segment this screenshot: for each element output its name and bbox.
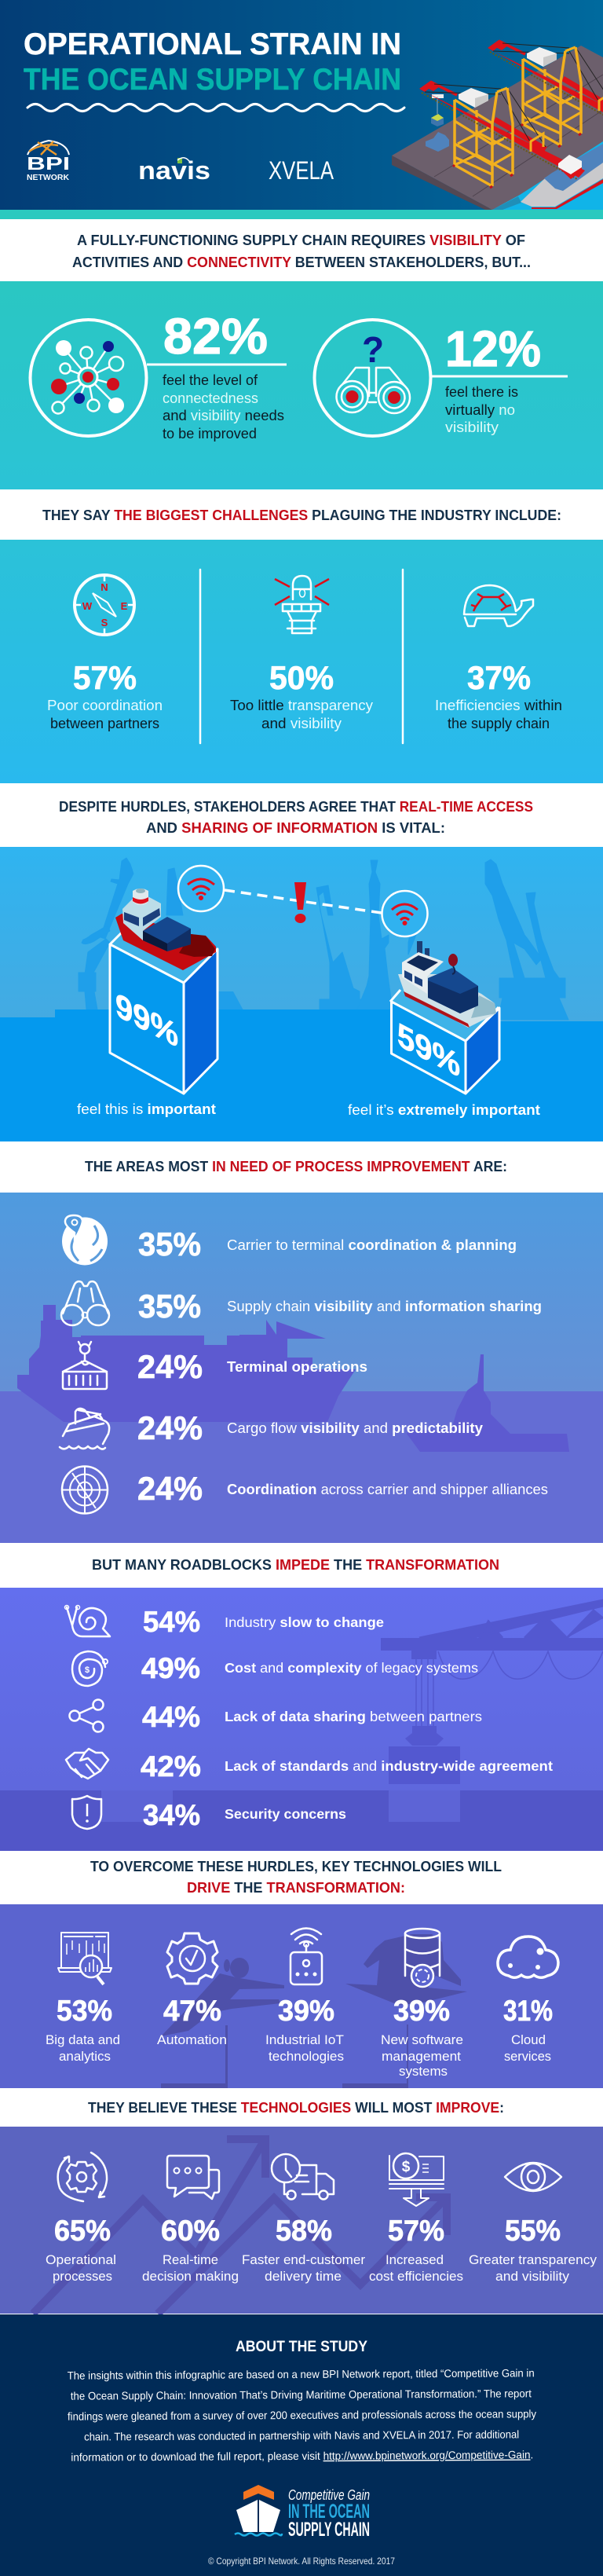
challenge: compass [47, 575, 163, 731]
icon: gear check [167, 1933, 217, 1984]
row 1: Carrier to terminal coordination & planning [227, 1237, 517, 1253]
challenge: turtle [435, 585, 562, 731]
row 1: 54% [143, 1606, 200, 1638]
row 2: 49% [141, 1652, 200, 1684]
item: delivery time [242, 2154, 365, 2284]
item: software systems: New software [381, 2032, 463, 2047]
item: real-time decisions: decision making [142, 2269, 239, 2284]
item: cloud [498, 1937, 558, 2064]
heading: key technologies [90, 1859, 502, 1896]
stat: 82%: feel the level of [163, 372, 258, 388]
row 5 [72, 1796, 346, 1831]
item: industrial IoT [265, 1928, 344, 2064]
challenge: lighthouse: Too little transparency [230, 698, 373, 713]
icon: money with down arrow: $ [402, 2159, 411, 2175]
title [24, 27, 401, 97]
study text: the Ocean Supply Chain: Innovation That’s Driving Maritime Operational Transformation.” The report [71, 2387, 532, 2402]
panel: process improvement [0, 1193, 603, 1543]
challenge: compass: between partners [50, 716, 159, 731]
teal strip [0, 210, 603, 219]
panel: roadblocks [0, 1588, 603, 1851]
row 2: Supply chain visibility and information sharing [227, 1299, 542, 1314]
item: industrial IoT: Industrial IoT [265, 2032, 344, 2047]
icon: IoT device [291, 1928, 322, 1984]
stat: 82%: 82% [163, 308, 268, 365]
challenge: compass: 57% [73, 659, 137, 696]
icon: eye [505, 2163, 561, 2191]
icon: cloud [498, 1937, 558, 1977]
row 4 [60, 1409, 483, 1449]
item: big data: 53% [57, 1995, 112, 2027]
challenge: turtle: the supply chain [448, 716, 550, 731]
icon: radar [62, 1466, 108, 1513]
heading: visibility and connectivity [72, 233, 531, 270]
icon: binoculars with question mark: ? [362, 329, 384, 370]
study text [68, 2366, 536, 2464]
challenge: turtle: Inefficiencies within [435, 698, 562, 713]
challenge: lighthouse: and visibility [261, 716, 342, 731]
row 3: Terminal operations [227, 1359, 367, 1375]
icon: delivery truck with clock [272, 2154, 334, 2200]
heading: real-time access: AND SHARING OF INFORMATION IS VITAL: [146, 820, 445, 836]
logo: BPI Network: NETWORK [27, 173, 69, 182]
item: delivery time: 58% [276, 2215, 332, 2247]
logo: Competitive Gain: SUPPLY CHAIN [288, 2519, 370, 2541]
icon: handshake [66, 1749, 108, 1779]
study text: The insights within this infographic are based on a new BPI Network report, titled “Competitive Gain in [68, 2366, 535, 2382]
icon: shield [72, 1796, 101, 1829]
caption: 59%: feel it’s extremely important [348, 1102, 540, 1118]
item: big data: analytics [59, 2049, 111, 2064]
item: industrial IoT: 39% [278, 1995, 334, 2027]
challenge: turtle: 37% [467, 659, 531, 696]
item: big data [46, 1933, 120, 2064]
panel: visibility statistics [0, 281, 603, 489]
icon: dollar spiral [72, 1651, 108, 1686]
stat: 82%: and visibility needs [163, 408, 284, 423]
item: transparency: Greater transparency [469, 2252, 597, 2267]
ship: red cargo ship [115, 889, 216, 970]
heading: roadblocks: BUT MANY ROADBLOCKS IMPEDE THE TRANSFORMATION [92, 1557, 499, 1573]
heading: key technologies: TO OVERCOME THESE HURDLES, KEY TECHNOLOGIES WILL [90, 1859, 502, 1874]
item: operational processes: processes [53, 2269, 112, 2284]
challenge: lighthouse [230, 576, 373, 731]
item: software systems: systems [399, 2064, 448, 2079]
item: real-time decisions [142, 2156, 239, 2284]
logo: Competitive Gain: IN THE OCEAN [288, 2501, 370, 2523]
item: real-time decisions: 60% [161, 2215, 220, 2247]
item: software systems [381, 1929, 463, 2079]
dashed connection and alert [225, 882, 382, 923]
icon: globe with pin [62, 1215, 108, 1265]
study heading: ABOUT THE STUDY [236, 2339, 367, 2355]
icon: share [69, 1700, 104, 1731]
heading: process improvement: THE AREAS MOST IN NEED OF PROCESS IMPROVEMENT ARE: [85, 1159, 507, 1174]
item: software systems: 39% [393, 1995, 450, 2027]
logo: Navis: navis [138, 156, 210, 185]
heading: technologies improve: THEY BELIEVE THESE TECHNOLOGIES WILL MOST IMPROVE: [88, 2100, 504, 2116]
row 1: Industry slow to change [225, 1614, 384, 1630]
row 4: 24% [137, 1409, 203, 1446]
row 1: 35% [138, 1226, 201, 1262]
title: OPERATIONAL STRAIN IN [24, 27, 401, 61]
challenge: lighthouse: 50% [269, 659, 334, 696]
challenge: compass: S [101, 617, 108, 628]
bar: 59%: 59% [397, 1015, 460, 1085]
challenge: compass: E [121, 600, 128, 612]
item: operational processes: 65% [54, 2215, 111, 2247]
item: transparency: 55% [505, 2215, 561, 2247]
stat: 82%: connectedness [163, 390, 258, 406]
panel: about the study [0, 2314, 603, 2576]
stat: 82% [147, 308, 287, 442]
item: cost efficiencies: 57% [388, 2215, 444, 2247]
row 5: 24% [137, 1470, 203, 1507]
heading: real-time access [59, 799, 533, 836]
caption: 99%: feel this is important [77, 1101, 216, 1117]
challenge: compass: Poor coordination [47, 698, 163, 713]
item: cloud: services [504, 2049, 551, 2064]
item: cost efficiencies: cost efficiencies [369, 2269, 463, 2284]
heading: key technologies: DRIVE THE TRANSFORMATION: [187, 1880, 405, 1896]
ship: grey cargo ship [398, 941, 496, 1028]
icon: gear with arrows [58, 2153, 107, 2201]
panel: challenges [0, 540, 603, 783]
row 2: Cost and complexity of legacy systems [225, 1660, 478, 1676]
bar: 59% [390, 941, 499, 1094]
item: transparency [469, 2163, 597, 2284]
icon: wifi bubble left [178, 866, 224, 911]
bar: 99% [110, 889, 217, 1094]
row 3: 44% [142, 1701, 200, 1733]
item: delivery time: Faster end-customer [242, 2252, 365, 2267]
item: industrial IoT: technologies [269, 2049, 344, 2064]
bar: 99%: 99% [115, 985, 178, 1055]
logo: BPI Network: BPI [27, 153, 70, 174]
ground water [0, 1010, 603, 1141]
port crane silhouettes [79, 858, 568, 1020]
row 3: 24% [137, 1348, 203, 1385]
heading: real-time access: DESPITE HURDLES, STAKEHOLDERS AGREE THAT REAL-TIME ACCESS [59, 799, 533, 815]
row 5: Coordination across carrier and shipper alliances [227, 1482, 548, 1497]
row 2: 35% [138, 1288, 201, 1325]
row 4: Lack of standards and industry-wide agreement [225, 1758, 553, 1774]
silhouette: container ship [17, 1305, 356, 1422]
row 5: 34% [143, 1799, 200, 1831]
row 4: 42% [141, 1750, 201, 1783]
panel: technology benefits [0, 2127, 603, 2314]
row 5: Security concerns [225, 1806, 346, 1822]
item: operational processes: Operational [46, 2252, 116, 2267]
copyright: © Copyright BPI Network. All Rights Reserved. 2017 [208, 2556, 395, 2567]
item: automation: Automation [157, 2032, 227, 2047]
icon: money with down arrow [389, 2153, 444, 2206]
icon: database [405, 1929, 440, 1987]
logo: BPI Network [27, 141, 70, 182]
row 2 [72, 1651, 478, 1686]
item: cloud: 31% [503, 1995, 553, 2027]
stat: 12%: 12% [445, 321, 541, 377]
stat: 12%: visibility [445, 420, 499, 435]
row 4 [66, 1749, 553, 1783]
item: operational processes [46, 2153, 116, 2284]
silhouette: hurdlers [161, 1934, 467, 2088]
icon: wifi bubble right [382, 891, 427, 936]
row 2 [61, 1281, 542, 1325]
row 4: Cargo flow visibility and predictability [227, 1420, 483, 1436]
row 1 [64, 1606, 384, 1638]
row 5 [62, 1466, 548, 1513]
item: delivery time: delivery time [265, 2269, 342, 2284]
item: automation [157, 1933, 227, 2047]
stat: 12% [431, 321, 568, 435]
challenge: compass: N [100, 581, 108, 593]
icon: dollar spiral: $ [85, 1665, 90, 1675]
row 3 [69, 1700, 482, 1733]
study text: findings were gleaned from a survey of over 200 executives and professionals across the ocean supply [68, 2407, 536, 2423]
challenge: compass: W [82, 600, 93, 612]
panel: real-time access stats [0, 847, 603, 1141]
study text: chain. The research was conducted in partnership with Navis and XVELA in 2017. For additional [84, 2428, 519, 2443]
item: cloud: Cloud [511, 2032, 546, 2047]
row 1 [62, 1215, 517, 1265]
silhouette: upward arrows [33, 2138, 447, 2314]
row 3: Lack of data sharing between partners [225, 1709, 482, 1724]
row 3 [63, 1342, 367, 1389]
item: software systems: management [382, 2049, 461, 2064]
heading: visibility and connectivity: ACTIVITIES AND CONNECTIVITY BETWEEN STAKEHOLDERS, BUT... [72, 255, 531, 270]
panel: key technologies [0, 1904, 603, 2088]
silhouette: gantry crane [381, 1600, 603, 1784]
stat: 12%: feel there is [445, 384, 518, 400]
item: real-time decisions: Real-time [163, 2252, 218, 2267]
icon: binoculars with question mark [314, 320, 430, 436]
study text: information or to download the full report, please visit http://www.bpinetwork.org/Competitive-Gain. [71, 2448, 533, 2464]
item: transparency: and visibility [495, 2269, 570, 2284]
item: automation: 47% [163, 1995, 221, 2027]
wave divider [27, 104, 404, 112]
logo: XVELA: XVELA [269, 156, 334, 185]
icon: snail [64, 1606, 110, 1636]
icon: analytics dashboard [58, 1933, 111, 1984]
heading: biggest challenges: THEY SAY THE BIGGEST CHALLENGES PLAGUING THE INDUSTRY INCLUDE: [42, 508, 561, 523]
icon: cruise ship [60, 1409, 109, 1449]
icon: binoculars [61, 1281, 109, 1325]
icon: container on hook [63, 1342, 107, 1389]
icon: network [30, 320, 146, 436]
silhouette: tugboat [407, 1354, 569, 1452]
item: cost efficiencies: Increased [386, 2252, 444, 2267]
stat: 12%: virtually no [445, 402, 515, 418]
item: cost efficiencies [369, 2153, 463, 2284]
logo: Competitive Gain: Competitive Gain [288, 2487, 370, 2503]
port illustration with cranes and ship [392, 40, 603, 210]
header banner [0, 0, 603, 210]
icon: chat bubbles [167, 2156, 219, 2199]
title: THE OCEAN SUPPLY CHAIN [24, 63, 401, 97]
item: big data: Big data and [46, 2032, 120, 2047]
logo: Competitive Gain [235, 2485, 370, 2541]
stat: 82%: to be improved [163, 426, 257, 442]
heading: visibility and connectivity: A FULLY-FUNCTIONING SUPPLY CHAIN REQUIRES VISIBILITY OF [77, 233, 525, 248]
